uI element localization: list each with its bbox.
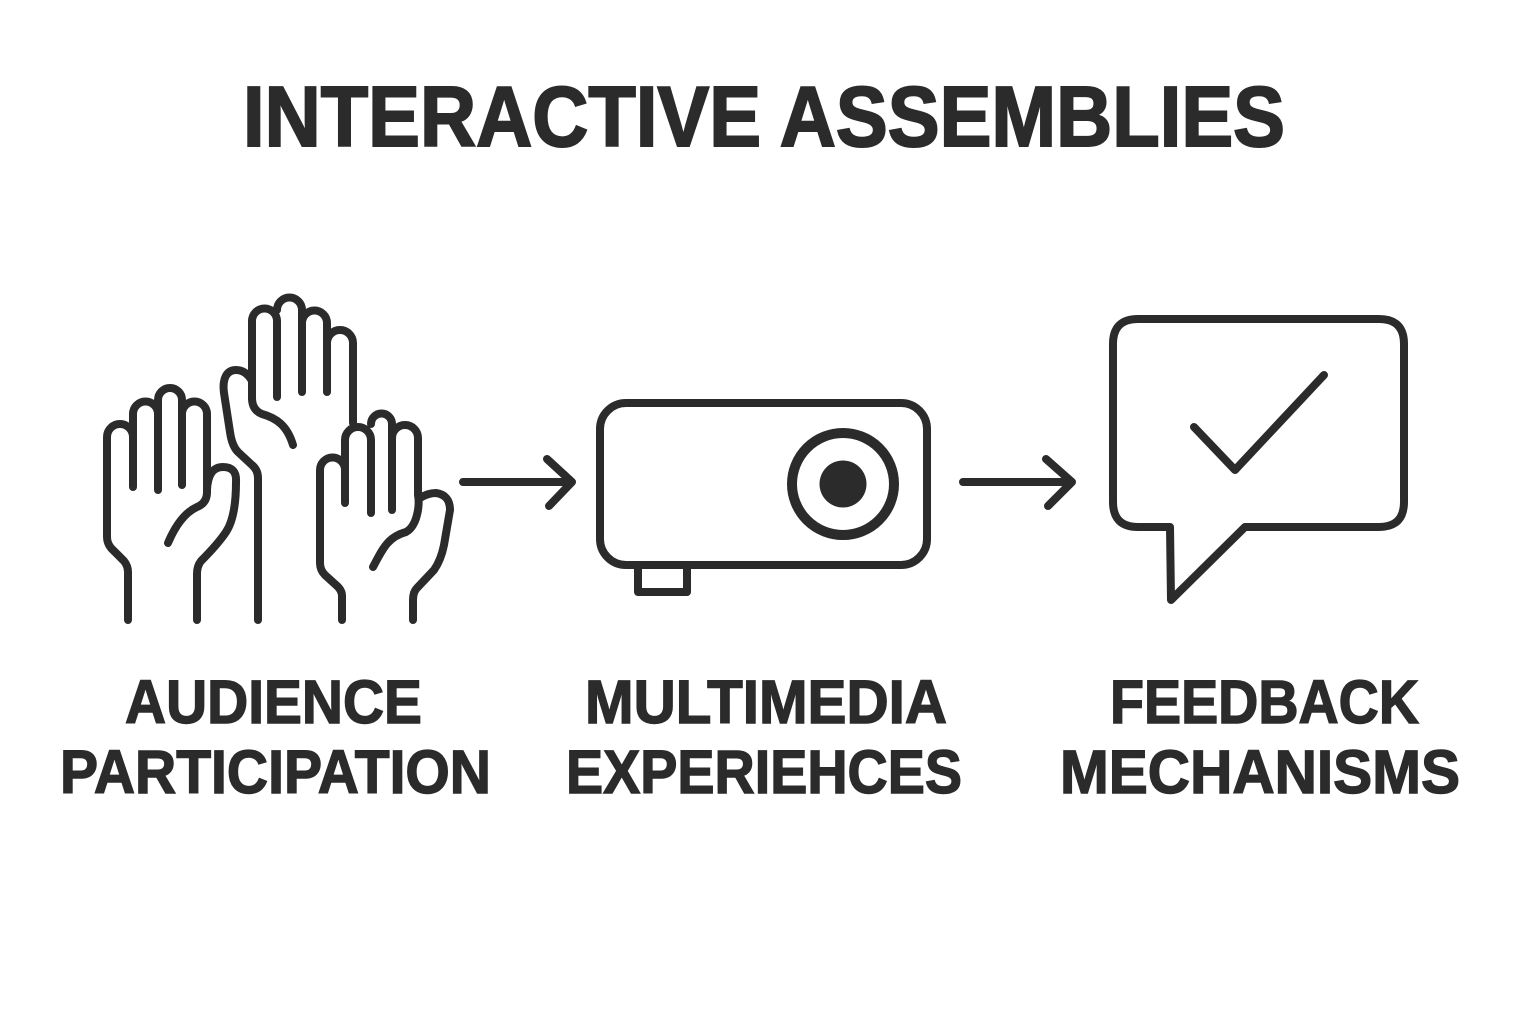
label: audience participation: AUDIENCE [125, 668, 422, 736]
right hand [320, 414, 450, 620]
label: audience participation: PARTICIPATION [60, 738, 491, 806]
icon: speech bubble with check mark [1113, 319, 1404, 600]
arrow: multimedia to feedback [963, 459, 1072, 506]
label: feedback mechanisms [1060, 668, 1460, 806]
icon: projector [600, 403, 927, 592]
speech bubble [1113, 319, 1404, 600]
label: multimedia experiences: MULTIMEDIA [585, 668, 947, 736]
projector lens centre [820, 460, 866, 508]
left hand [107, 388, 236, 620]
projector body [600, 403, 927, 565]
arrow: participation to multimedia [463, 459, 572, 506]
label: feedback mechanisms: MECHANISMS [1060, 738, 1460, 806]
check mark [1194, 375, 1324, 470]
icon: raised hands [107, 298, 450, 620]
label: audience participation [60, 668, 491, 806]
projector lens ring [792, 433, 894, 535]
label: feedback mechanisms: FEEDBACK [1110, 668, 1419, 736]
projector foot [638, 565, 687, 592]
label: multimedia experiences [566, 668, 962, 806]
centre hand [224, 298, 353, 620]
title: INTERACTIVE ASSEMBLIES [243, 70, 1285, 165]
label: multimedia experiences: EXPERIEHCES [566, 738, 962, 806]
